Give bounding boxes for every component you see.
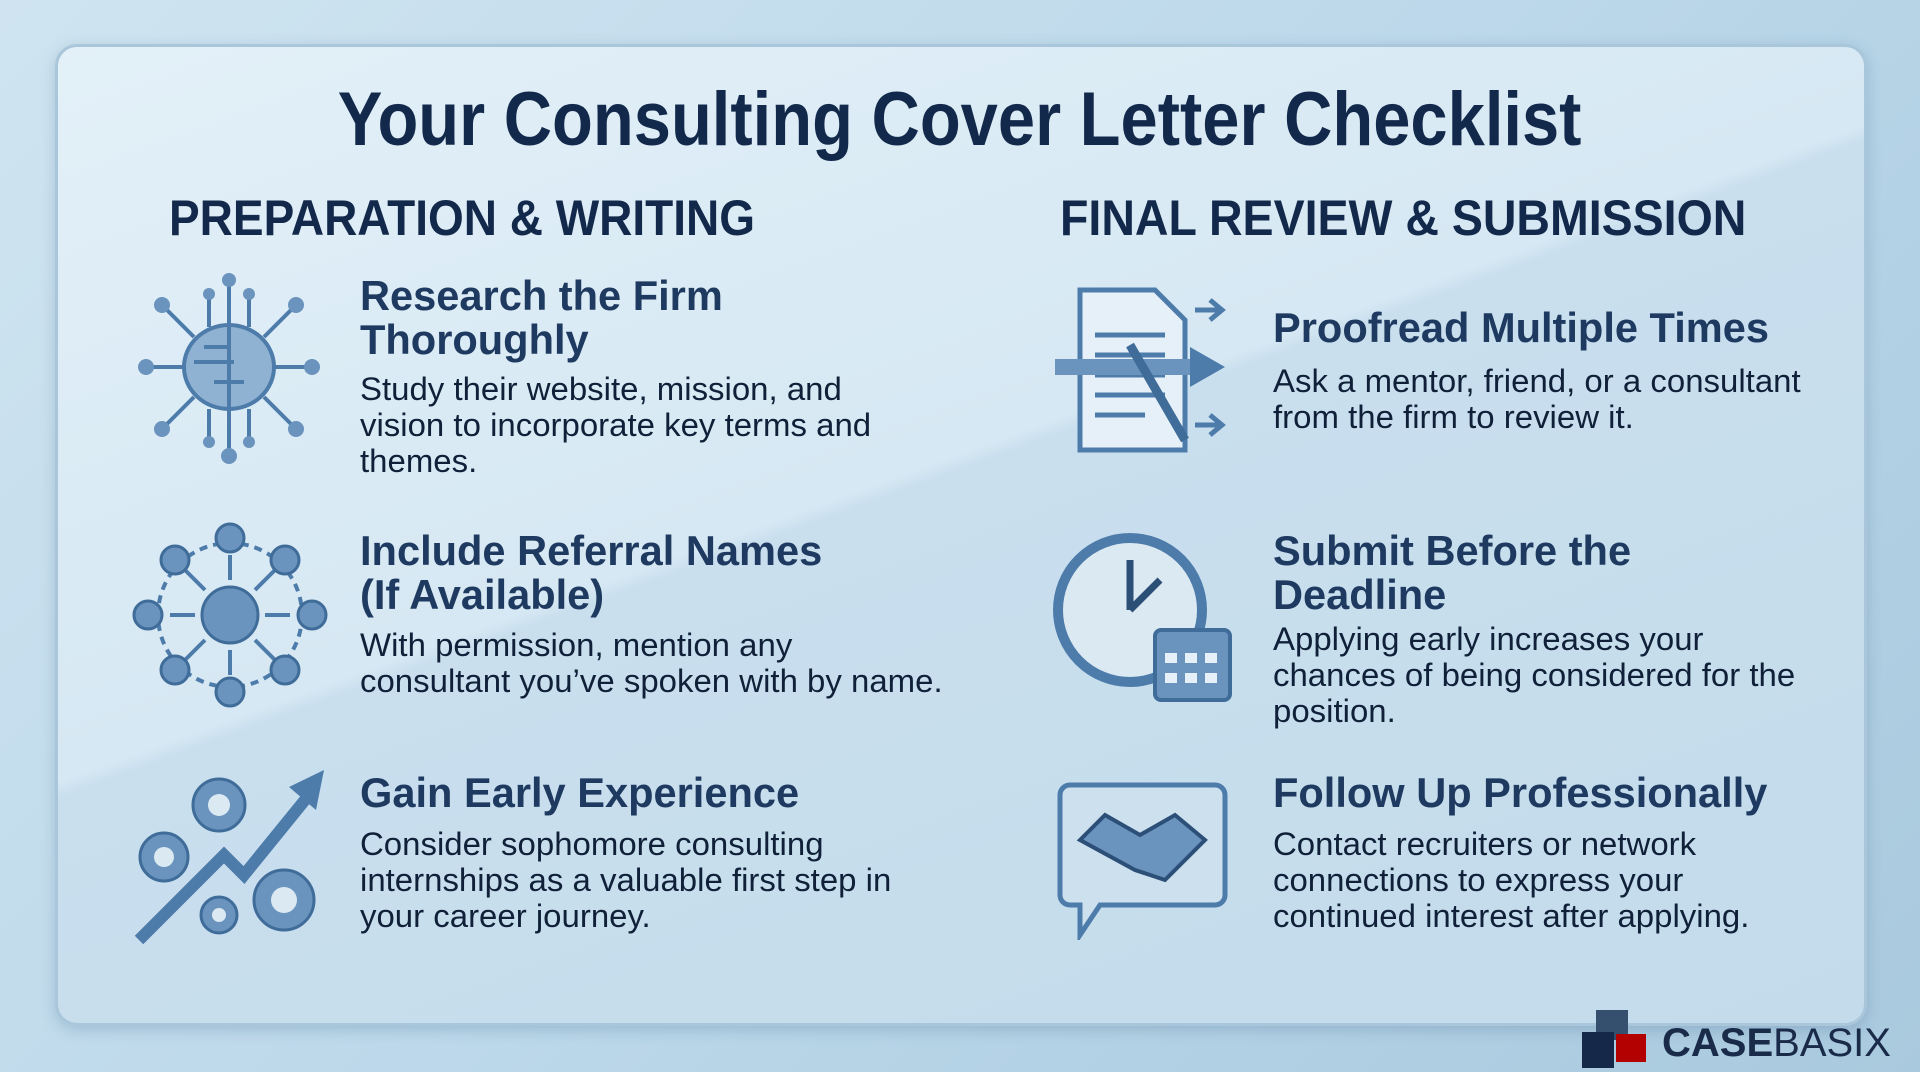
text block: submit before deadline — [1273, 527, 1795, 729]
icon: brain — [138, 273, 320, 464]
text: from the firm to review it. — [1273, 399, 1634, 435]
text: Ask a mentor, friend, or a consultant — [1273, 363, 1801, 399]
text: Proofread Multiple Times — [1273, 304, 1769, 351]
text: themes. — [360, 443, 477, 479]
text: (If Available) — [360, 571, 604, 618]
text: Gain Early Experience — [360, 769, 799, 816]
heading: final review & submission: FINAL REVIEW & SUBMISSION — [1060, 190, 1746, 246]
text: consultant you’ve spoken with by name. — [360, 663, 943, 699]
text block: gain early experience — [360, 769, 891, 934]
text: Submit Before the — [1273, 527, 1631, 574]
text: continued interest after applying. — [1273, 898, 1749, 934]
text: Include Referral Names — [360, 527, 822, 574]
text block: follow up — [1273, 769, 1768, 934]
text: Contact recruiters or network — [1273, 826, 1696, 862]
icon: referral network — [132, 522, 328, 708]
text: Follow Up Professionally — [1273, 769, 1767, 816]
text block: proofread — [1273, 304, 1801, 435]
icon: clock and calendar — [1053, 533, 1232, 702]
icon: proofread document — [1055, 288, 1226, 452]
text: connections to express your — [1273, 862, 1683, 898]
text: Thoroughly — [360, 316, 589, 363]
icon: gears and arrow — [134, 770, 324, 944]
text: Applying early increases your — [1273, 621, 1704, 657]
text: Research the Firm — [360, 272, 723, 319]
text: vision to incorporate key terms and — [360, 407, 871, 443]
text: internships as a valuable first step in — [360, 862, 891, 898]
text block: include referral names — [360, 527, 943, 699]
text: position. — [1273, 693, 1396, 729]
icon: handshake speech bubble — [1058, 782, 1228, 940]
logo: casebasix: CASEBASIX — [1662, 1021, 1891, 1065]
logo: casebasix — [1582, 1010, 1891, 1068]
text block: research the firm — [360, 272, 871, 479]
text: chances of being considered for the — [1273, 657, 1795, 693]
text: Deadline — [1273, 571, 1446, 618]
heading: preparation & writing: PREPARATION & WRITING — [169, 190, 755, 246]
title: Your Consulting Cover Letter Checklist — [338, 77, 1582, 162]
text: With permission, mention any — [360, 627, 792, 663]
text: Consider sophomore consulting — [360, 826, 824, 862]
text: your career journey. — [360, 898, 651, 934]
text: Study their website, mission, and — [360, 371, 842, 407]
